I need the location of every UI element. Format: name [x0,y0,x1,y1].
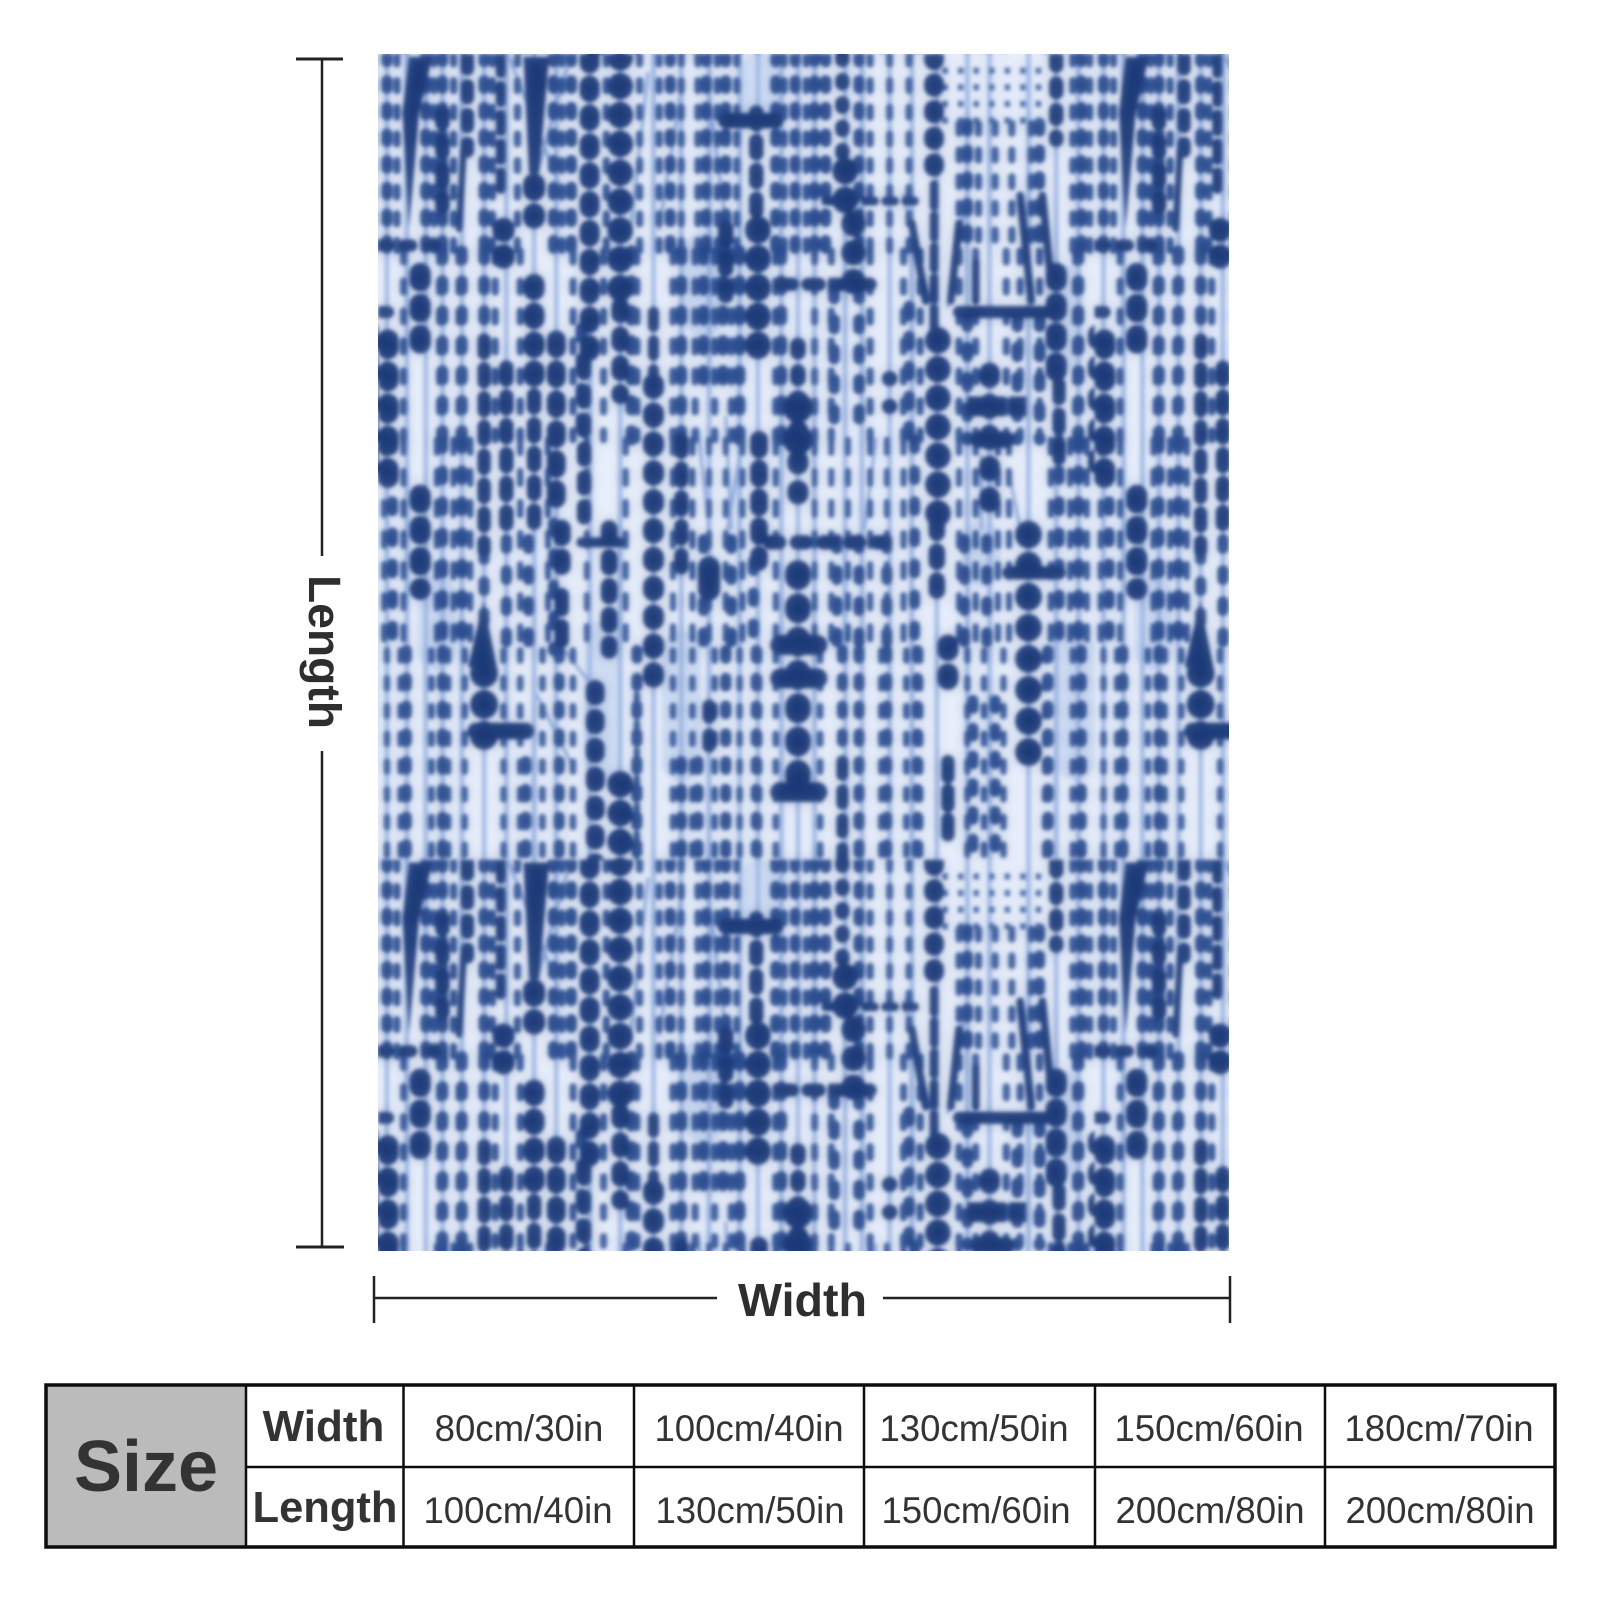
row: length: 130cm/50in [655,1490,845,1531]
row: length: 100cm/40in [423,1490,613,1531]
size table: Size [74,1427,218,1507]
row: width: 150cm/60in [1114,1408,1304,1449]
row: width: Width [263,1402,384,1451]
width dimension marker [374,1274,1230,1326]
row: length: 150cm/60in [881,1490,1071,1531]
row: length: 200cm/80in [1115,1490,1305,1531]
row: width: 180cm/70in [1344,1408,1534,1449]
row: width: 100cm/40in [654,1408,844,1449]
row: length: Length [253,1484,397,1532]
width label: Width [738,1274,867,1326]
row: width: 130cm/50in [879,1408,1069,1449]
row: length [253,1484,1535,1532]
size table [46,1385,1555,1547]
size header cell [46,1385,245,1546]
row: width [263,1402,1534,1451]
blanket photo: tie-dye pattern [378,54,1229,1251]
row: length: 200cm/80in [1345,1490,1535,1531]
length label: Length [299,575,350,729]
row: width: 80cm/30in [435,1408,603,1449]
length dimension marker [296,59,350,1247]
